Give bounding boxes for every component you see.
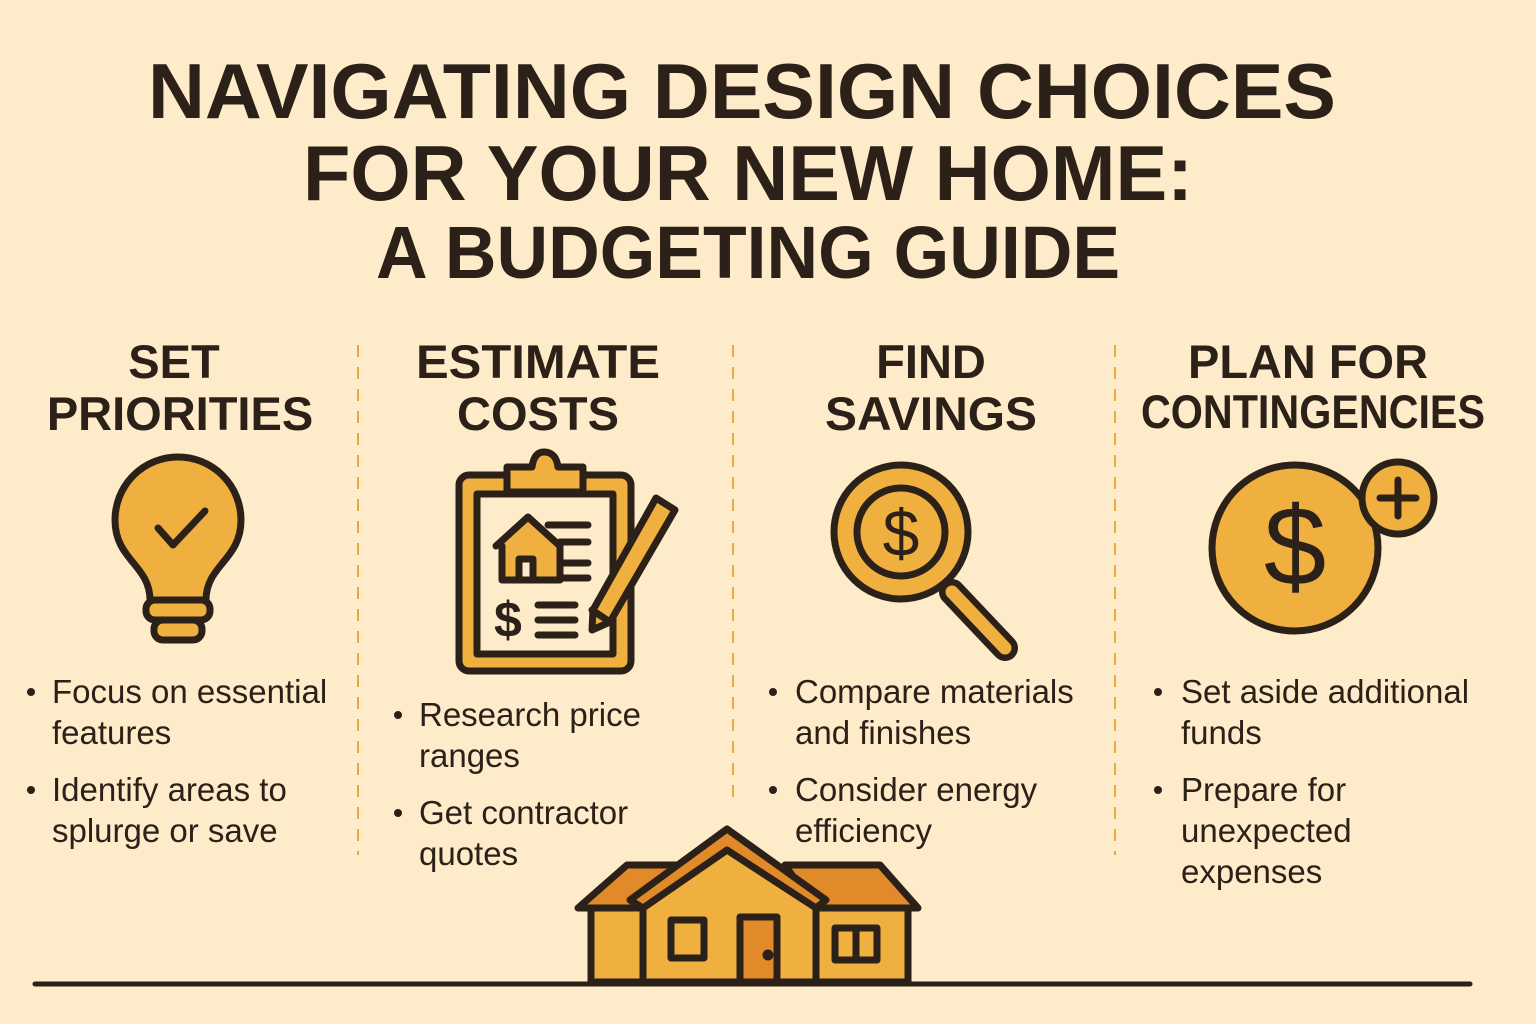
title [148,47,1336,294]
bullets: plan for contingencies: funds [1181,714,1262,751]
heading: estimate costs [416,335,660,440]
bullets: plan for contingencies: unexpected [1181,812,1352,849]
icon: clipboard: $ [494,592,522,648]
bullets: set priorities: Identify areas to [52,771,287,808]
bullets: estimate costs: quotes [419,835,518,872]
bullets: plan for contingencies: Prepare for [1181,771,1346,808]
heading: estimate costs: ESTIMATE [416,335,660,388]
bullets: plan for contingencies: Set aside additional [1181,673,1469,710]
bullets: find savings: Consider energy [795,771,1038,808]
icon: magnifier dollar: $ [883,496,919,570]
house illustration [578,829,918,982]
icon: magnifier dollar [834,465,1005,648]
heading: plan for contingencies: PLAN FOR [1188,335,1428,388]
bullets: set priorities: splurge or save [52,812,278,849]
bullets: find savings: efficiency [795,812,932,849]
title: FOR YOUR NEW HOME: [303,129,1193,217]
bullets: estimate costs [394,696,641,872]
icon: lightbulb [115,457,241,640]
icon: coin with plus [1212,462,1434,631]
bullets: find savings [769,673,1074,849]
heading: estimate costs: COSTS [457,387,619,440]
bullets: estimate costs: Get contractor [419,794,628,831]
heading: set priorities: SET [128,335,220,388]
bullets: set priorities: Focus on essential [52,673,327,710]
bullets: set priorities: features [52,714,171,751]
icon: coin with plus: $ [1264,484,1326,609]
icon: clipboard [459,452,675,671]
bullets: plan for contingencies [1154,673,1469,890]
bullets: estimate costs: ranges [419,737,520,774]
heading: plan for contingencies: CONTINGENCIES [1141,385,1485,438]
bullets: plan for contingencies: expenses [1181,853,1322,890]
title: A BUDGETING GUIDE [376,211,1120,294]
heading: plan for contingencies [1141,335,1485,438]
heading: find savings: FIND [876,335,986,388]
bullets: estimate costs: Research price [419,696,641,733]
ground line [35,982,1470,986]
heading: find savings: SAVINGS [825,387,1037,440]
heading: find savings [825,335,1037,440]
heading: set priorities [47,335,313,440]
bullets: find savings: Compare materials [795,673,1074,710]
bullets: set priorities [27,673,327,849]
heading: set priorities: PRIORITIES [47,387,313,440]
title: NAVIGATING DESIGN CHOICES [148,47,1336,135]
bullets: find savings: and finishes [795,714,971,751]
